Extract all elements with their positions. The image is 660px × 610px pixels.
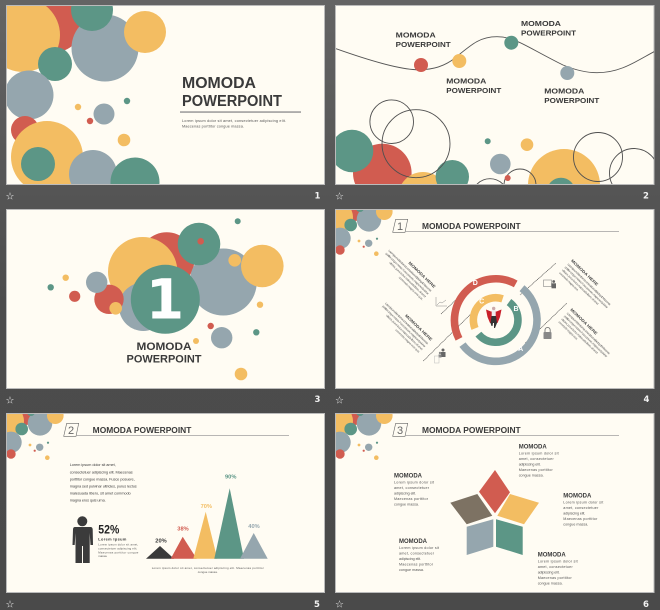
text block: lower left [399, 539, 439, 572]
heading: MOMODA POWERPOINT [422, 222, 521, 231]
page number 4: 4 [644, 395, 650, 405]
page number 3: 3 [314, 395, 320, 405]
text block: lower left: MOMODA [399, 539, 428, 545]
icon: presenter at screen [544, 280, 556, 288]
heading: MOMODA POWERPOINT [93, 426, 192, 435]
ring letters: A [518, 346, 523, 353]
text block: lower right: Maecenas porttitor [538, 576, 572, 580]
footer star 2: ☆ [335, 192, 344, 202]
text block: lower left: MOMODA HERE [404, 313, 434, 342]
paragraph [70, 462, 137, 503]
text block: lower right: MOMODA HERE [569, 307, 599, 336]
text block: right [563, 494, 603, 527]
section title: POWERPOINT [126, 354, 202, 366]
text block: upper left: Lorem ipsum dolor sit amet, consectetuer adipiscing elit. Maecenas [387, 249, 433, 293]
text block: right: Maecenas porttitor [563, 517, 598, 521]
diagonal leader lines [423, 263, 567, 361]
text block: lower left: Lorem ipsum dolor sit amet, consectetuer adipiscing elit. Maecenas [384, 301, 430, 346]
stat caption: Lorem ipsum dolor sit amet, [98, 543, 139, 547]
text block: lower right [538, 552, 578, 585]
ring letters: B [513, 306, 519, 313]
text block: right: MOMODA [563, 494, 592, 500]
stat caption [98, 537, 139, 558]
section bubble cluster [48, 218, 284, 380]
paragraph: porttitor congue massa. Fusce posuere, [70, 476, 135, 481]
icon: line chart [436, 297, 447, 306]
text block: lower right: Lorem ipsum dolor sit amet, consectetuer adipiscing elit. Maecenas [566, 311, 611, 356]
text block: upper left: ultricies, purus lectus malesuada libero, sit amet [388, 261, 427, 298]
text block: lower left: Lorem ipsum dolor sit [399, 546, 439, 550]
timeline labels [396, 19, 600, 105]
cover title [182, 75, 282, 110]
timeline dots [414, 36, 574, 80]
text block: left: adipiscing elit. [394, 492, 416, 496]
text block: lower left [376, 297, 434, 354]
section title [126, 341, 202, 366]
stat caption: Maecenas porttitor congue [98, 550, 139, 554]
star petals [450, 470, 539, 555]
paragraph: malesuada libero, sit amet commodo [70, 491, 131, 496]
text block: left: Maecenas porttitor [394, 497, 429, 501]
cover subtitle: Lorem ipsum dolor sit amet, consectetuer adipiscing elit. [182, 119, 286, 123]
chart caption: Lorem ipsum dolor sit amet, consectetuer adipiscing elit. Maecenas porttitor [152, 566, 264, 570]
text block: lower left: porttitor congue massa. Fusce posuere, magna sed pulvinar [381, 304, 427, 348]
text block: upper right [558, 258, 616, 315]
heading [393, 219, 619, 233]
stat caption: consectetuer adipiscing elit. [98, 546, 138, 550]
text block: right: adipiscing elit. [563, 512, 585, 516]
bottom bubbles and rings [336, 100, 654, 184]
page number 2: 2 [643, 192, 649, 202]
text block: right: Lorem ipsum dolor sit [563, 501, 603, 505]
cover bubble cluster [7, 6, 166, 184]
wavy line [336, 37, 654, 73]
section number: 1 [146, 267, 184, 331]
center figure icon [486, 307, 502, 328]
text block: top: Lorem ipsum dolor sit [519, 451, 559, 455]
page number 6: 6 [643, 600, 649, 610]
footer star 4: ☆ [335, 396, 344, 406]
text block: lower right: porttitor congue massa. Fusce posuere, magna sed pulvinar [563, 314, 608, 358]
cover subtitle: Maecenas porttitor congue massa. [182, 124, 244, 128]
text block: upper left: commodo magna eros quis. [398, 275, 424, 301]
text block: lower left: ultricies, purus lectus malesuada libero, sit amet [385, 313, 424, 351]
stat: 52%: 52% [98, 522, 120, 536]
heading: 1 [397, 221, 403, 233]
text block: lower left: commodo magna eros quis. [394, 328, 421, 354]
text block: lower left: amet, consectetuer [399, 552, 435, 556]
heading: MOMODA POWERPOINT [422, 426, 521, 435]
corner bubbles [7, 414, 64, 460]
chart value labels: 90% [225, 474, 236, 480]
chart value labels: 70% [201, 504, 212, 510]
text block: upper left: porttitor congue massa. Fusce posuere, magna sed pulvinar [385, 252, 430, 295]
timeline labels: MOMODA [521, 19, 562, 28]
chart value labels: 40% [248, 524, 260, 530]
text block: top [519, 444, 559, 477]
text block: lower right: adipiscing elit. [538, 570, 560, 574]
heading [393, 423, 619, 437]
text block: upper right: Lorem ipsum dolor sit amet, consectetuer adipiscing elit. Maecenas [567, 262, 612, 307]
text block: lower left: Maecenas porttitor [399, 562, 434, 566]
paragraph: magna sed pulvinar ultricies, purus lectus [70, 484, 137, 489]
text block: lower right: ultricies, purus lectus malesuada libero, sit amet [560, 317, 599, 355]
panel: slide 6 star diagram [323, 406, 654, 610]
text block: lower right [557, 307, 616, 364]
panel: slide 1 cover [0, 0, 324, 206]
text block: left [394, 474, 434, 507]
cover title: POWERPOINT [182, 93, 282, 110]
text block: lower right: commodo magna eros. [557, 320, 579, 341]
timeline labels: MOMODA [544, 87, 585, 96]
text block: lower right: Lorem ipsum dolor sit [538, 559, 578, 563]
footer star 1: ☆ [6, 192, 14, 202]
text block: upper right: porttitor congue massa. Fusce posuere, magna sed pulvinar [564, 265, 609, 309]
cover subtitle [182, 119, 286, 128]
timeline labels: POWERPOINT [396, 40, 451, 49]
corner bubbles [336, 210, 393, 256]
section title: MOMODA [136, 341, 192, 353]
text block: lower left: congue massa. [399, 568, 424, 572]
timeline labels: POWERPOINT [544, 96, 600, 105]
text block: right: congue massa. [563, 523, 588, 527]
stat caption: Lorem Ipsum [98, 537, 127, 542]
text block: left: congue massa. [394, 503, 419, 507]
panel: slide 4 ring diagram [323, 202, 654, 406]
page number 5: 5 [314, 600, 320, 610]
text block: lower right: amet, consectetuer [538, 565, 573, 569]
ring letters: C [479, 298, 484, 306]
footer star 3: ☆ [6, 396, 14, 406]
text block: lower left: adipiscing elit. [399, 557, 421, 561]
paragraph: consectetuer adipiscing elit. Maecenas [70, 469, 133, 474]
timeline labels: POWERPOINT [521, 28, 576, 37]
text block: left: amet, consectetuer [394, 486, 430, 490]
text block: top: MOMODA [519, 444, 547, 450]
ring letters: D [473, 280, 478, 287]
panel: slide 5 chart [0, 406, 324, 610]
text block: top: adipiscing elit. [519, 462, 541, 466]
chart caption [152, 566, 264, 574]
panel: slide 2 timeline [335, 5, 654, 200]
text block: upper right: MOMODA HERE [570, 258, 600, 287]
chart value labels: 38% [177, 527, 189, 533]
ring chart [454, 279, 537, 361]
chart caption: congue massa. [198, 570, 218, 574]
chart value labels [155, 474, 260, 544]
timeline labels: POWERPOINT [446, 86, 502, 95]
timeline labels: MOMODA [396, 30, 436, 40]
text block: lower right: congue massa. [538, 581, 563, 585]
text block: top: Maecenas porttitor [519, 468, 553, 472]
timeline labels: MOMODA [446, 77, 487, 86]
text block: top: congue massa. [519, 473, 544, 477]
heading [64, 423, 289, 437]
text block: left: MOMODA [394, 474, 423, 480]
text block: lower right: MOMODA [538, 552, 566, 558]
icon: person [72, 516, 93, 563]
icon: people [434, 348, 446, 363]
text block: left: Lorem ipsum dolor sit [394, 481, 434, 485]
icon: padlock [544, 327, 552, 339]
text block: upper left [379, 244, 437, 302]
page number 1: 1 [314, 192, 320, 202]
stat caption: massa. [98, 554, 108, 558]
paragraph: magna eros quis urna. [70, 498, 106, 503]
cover title: MOMODA [182, 75, 256, 92]
text block: right: amet, consectetuer [563, 506, 599, 510]
text block: top: amet, consectetuer [519, 457, 554, 461]
heading: 3 [397, 425, 403, 437]
corner bubbles [336, 414, 393, 460]
ring letters [473, 280, 523, 353]
heading: 2 [68, 425, 74, 437]
text block: upper left: MOMODA HERE [407, 260, 437, 289]
panel: slide 3 section [6, 210, 324, 406]
paragraph: Lorem ipsum dolor sit amet, [70, 462, 116, 467]
triangle chart [146, 488, 268, 559]
chart value labels: 20% [155, 538, 167, 544]
text block: upper right: commodo magna eros. [558, 271, 580, 292]
text block: upper right: ultricies, purus lectus malesuada libero, sit amet [561, 268, 600, 306]
